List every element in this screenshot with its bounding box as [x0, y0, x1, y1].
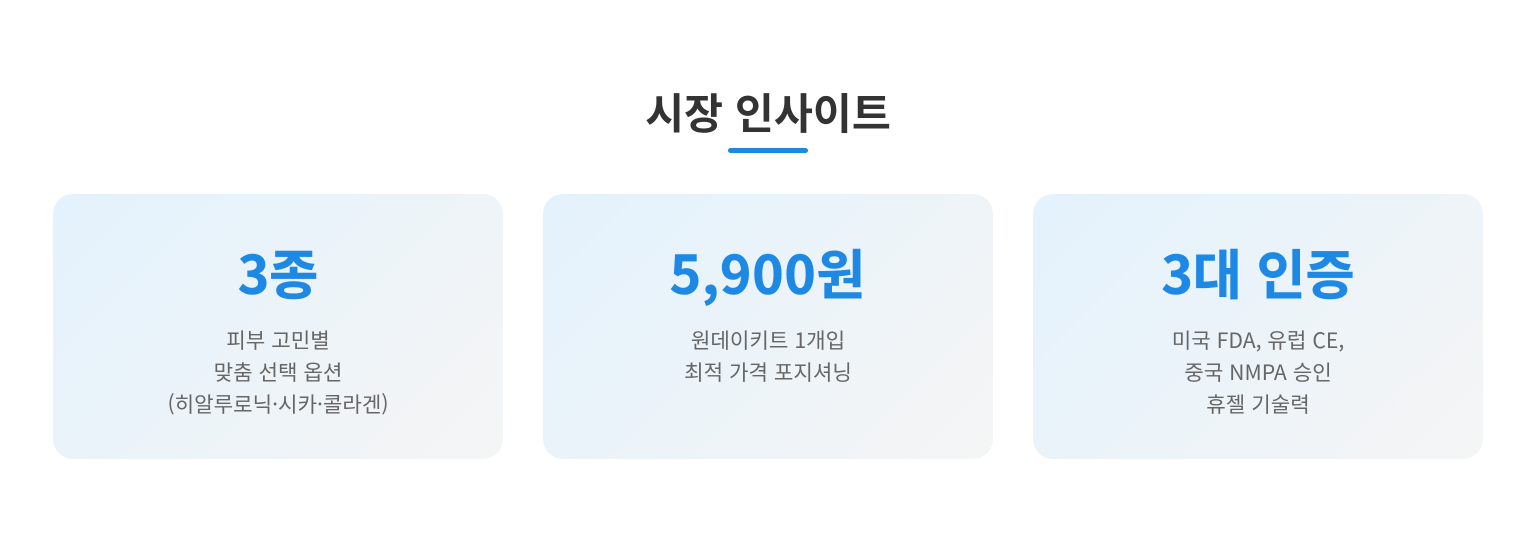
description: price: 원데이키트 1개입	[691, 324, 845, 355]
description: price: 최적 가격 포지셔닝	[684, 356, 852, 387]
description: product types	[167, 324, 389, 419]
description: product types: (히알루로닉·시카·콜라겐)	[167, 388, 389, 419]
description: certifications: 미국 FDA, 유럽 CE,	[1172, 324, 1344, 355]
title: 시장 인사이트	[645, 81, 891, 142]
panel: price	[543, 194, 993, 459]
description: product types: 맞춤 선택 옵션	[214, 356, 342, 387]
description: certifications	[1172, 324, 1344, 419]
description: price	[684, 324, 852, 387]
panel: product types	[53, 194, 503, 459]
title underline	[728, 148, 808, 153]
stat: 3 types: 3종	[238, 233, 318, 310]
stat: certifications: 3대 인증	[1161, 233, 1355, 310]
description: certifications: 휴젤 기술력	[1206, 388, 1310, 419]
description: product types: 피부 고민별	[226, 324, 330, 355]
panel: certifications	[1033, 194, 1483, 459]
description: certifications: 중국 NMPA 승인	[1184, 356, 1332, 387]
stat: price: 5,900원	[670, 233, 866, 310]
